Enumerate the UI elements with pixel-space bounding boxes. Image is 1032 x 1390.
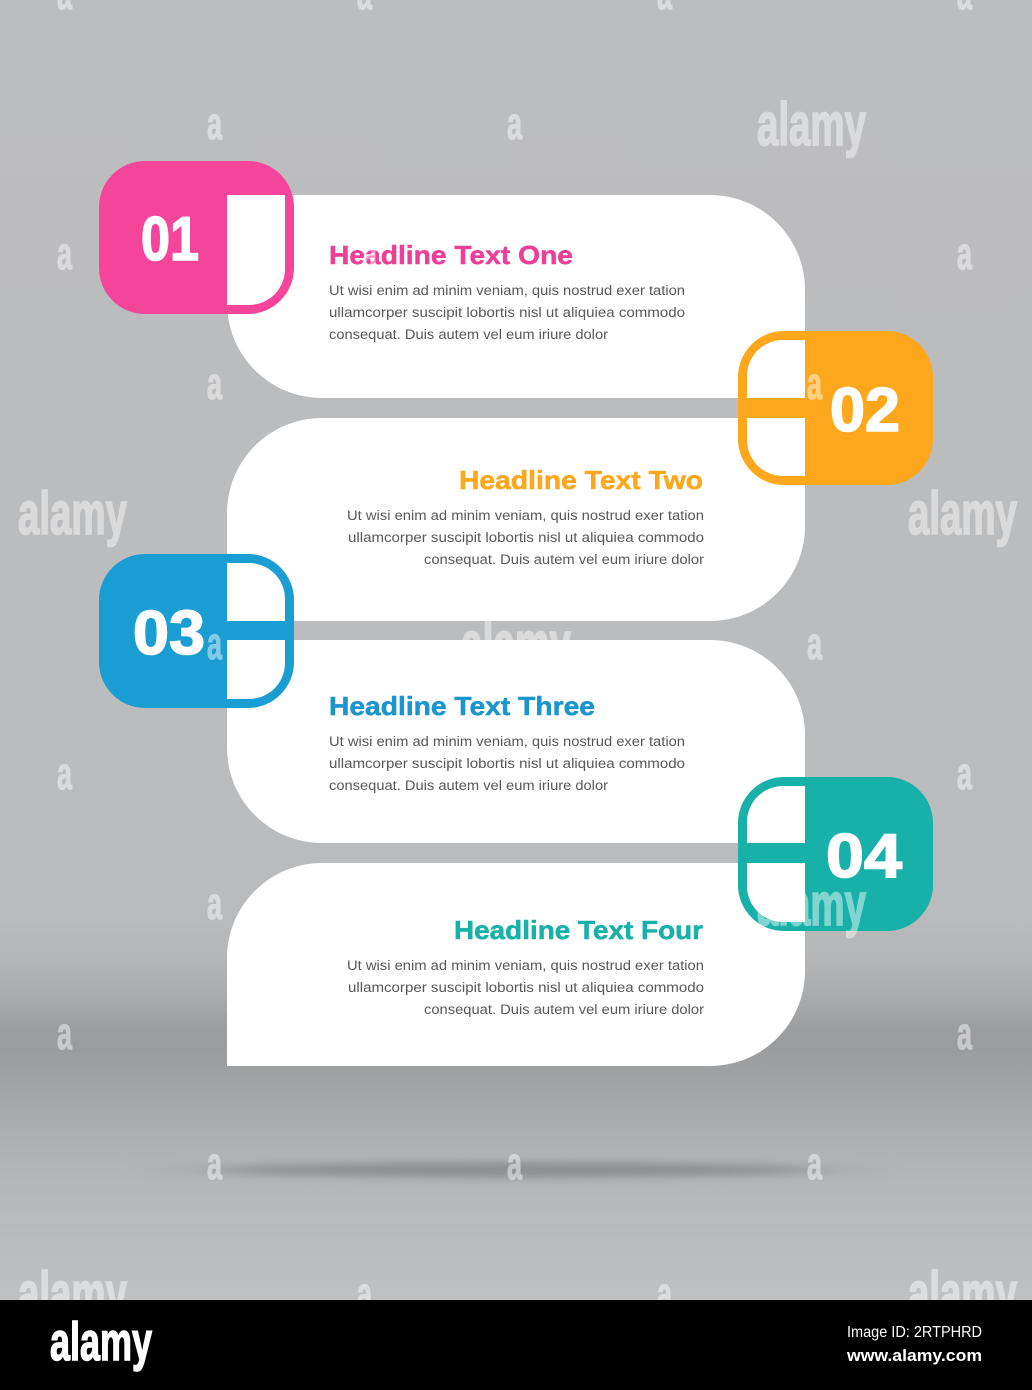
watermarks: a xyxy=(207,618,223,669)
watermarks: a xyxy=(57,1008,73,1059)
text block: step three: Ut wisi enim ad minim veniam, quis nostrud exer tation xyxy=(329,734,685,750)
badge: 03 xyxy=(99,554,294,708)
watermarks: a xyxy=(207,98,223,149)
text block: step three: consequat. Duis autem vel eum iriure dolor xyxy=(329,778,608,794)
watermarks: a xyxy=(57,228,73,279)
badge: 03: 03 xyxy=(133,599,205,668)
badge: 02: 02 xyxy=(830,376,900,445)
text block: step two: ullamcorper suscipit lobortis nisl ut aliquiea commodo xyxy=(348,530,704,546)
panel: card one xyxy=(227,195,805,398)
watermarks: a xyxy=(207,878,223,929)
watermarks: alamy xyxy=(18,1260,127,1327)
watermarks: a xyxy=(807,358,823,409)
website: www.alamy.com xyxy=(846,1346,982,1365)
text block: step one xyxy=(329,240,685,343)
footer logo: alamy xyxy=(50,1312,152,1372)
text block: step one: ullamcorper suscipit lobortis nisl ut aliquiea commodo xyxy=(329,305,685,321)
watermarks: a xyxy=(807,618,823,669)
watermarks: alamy xyxy=(18,480,127,547)
floor shadow xyxy=(206,1162,826,1178)
watermarks: a xyxy=(507,1138,523,1189)
text block: step one: consequat. Duis autem vel eum iriure dolor xyxy=(329,327,608,343)
watermarks: a xyxy=(807,1138,823,1189)
text block: step four xyxy=(347,915,704,1018)
watermarks: a xyxy=(957,1008,973,1059)
watermarks: alamy xyxy=(461,610,571,677)
text block: step three: ullamcorper suscipit lobortis nisl ut aliquiea commodo xyxy=(329,756,685,772)
badge: 04 xyxy=(738,777,933,931)
watermarks: a xyxy=(207,1138,223,1189)
text block: step one: Ut wisi enim ad minim veniam, quis nostrud exer tation xyxy=(329,283,685,299)
badge: 01 xyxy=(99,161,294,314)
watermarks: a xyxy=(657,1268,673,1319)
badge: 04: 04 xyxy=(826,822,903,891)
text block: step four: consequat. Duis autem vel eum iriure dolor xyxy=(424,1002,704,1018)
watermarks: a xyxy=(507,98,523,149)
text block: step two: Headline Text Two xyxy=(459,465,703,495)
watermarks: a xyxy=(207,358,223,409)
text block: step four: Headline Text Four xyxy=(454,915,703,945)
badge: 01: 01 xyxy=(141,205,199,274)
panel: card three xyxy=(227,640,805,843)
text block: step two xyxy=(347,465,704,568)
text block: step three: Headline Text Three xyxy=(329,691,595,721)
watermarks: alamy xyxy=(757,871,866,938)
text block: step three xyxy=(329,691,685,794)
text block: step two: Ut wisi enim ad minim veniam, quis nostrud exer tation xyxy=(347,508,704,524)
watermarks: a xyxy=(362,228,378,279)
text block: step four: Ut wisi enim ad minim veniam, quis nostrud exer tation xyxy=(347,958,704,974)
panel: card four xyxy=(227,863,805,1066)
text block: step one: Headline Text One xyxy=(329,240,573,270)
watermarks: alamy xyxy=(757,91,866,158)
watermarks: a xyxy=(957,748,973,799)
watermarks: a xyxy=(357,1268,373,1319)
text block: step two: consequat. Duis autem vel eum iriure dolor xyxy=(424,552,704,568)
footer bar xyxy=(0,1300,1032,1390)
watermarks: a xyxy=(57,748,73,799)
panel: card two xyxy=(227,418,805,621)
badge: 02 xyxy=(738,331,933,485)
image id: Image ID: 2RTPHRD xyxy=(847,1324,982,1341)
watermarks: a xyxy=(957,228,973,279)
text block: step four: ullamcorper suscipit lobortis nisl ut aliquiea commodo xyxy=(348,980,704,996)
